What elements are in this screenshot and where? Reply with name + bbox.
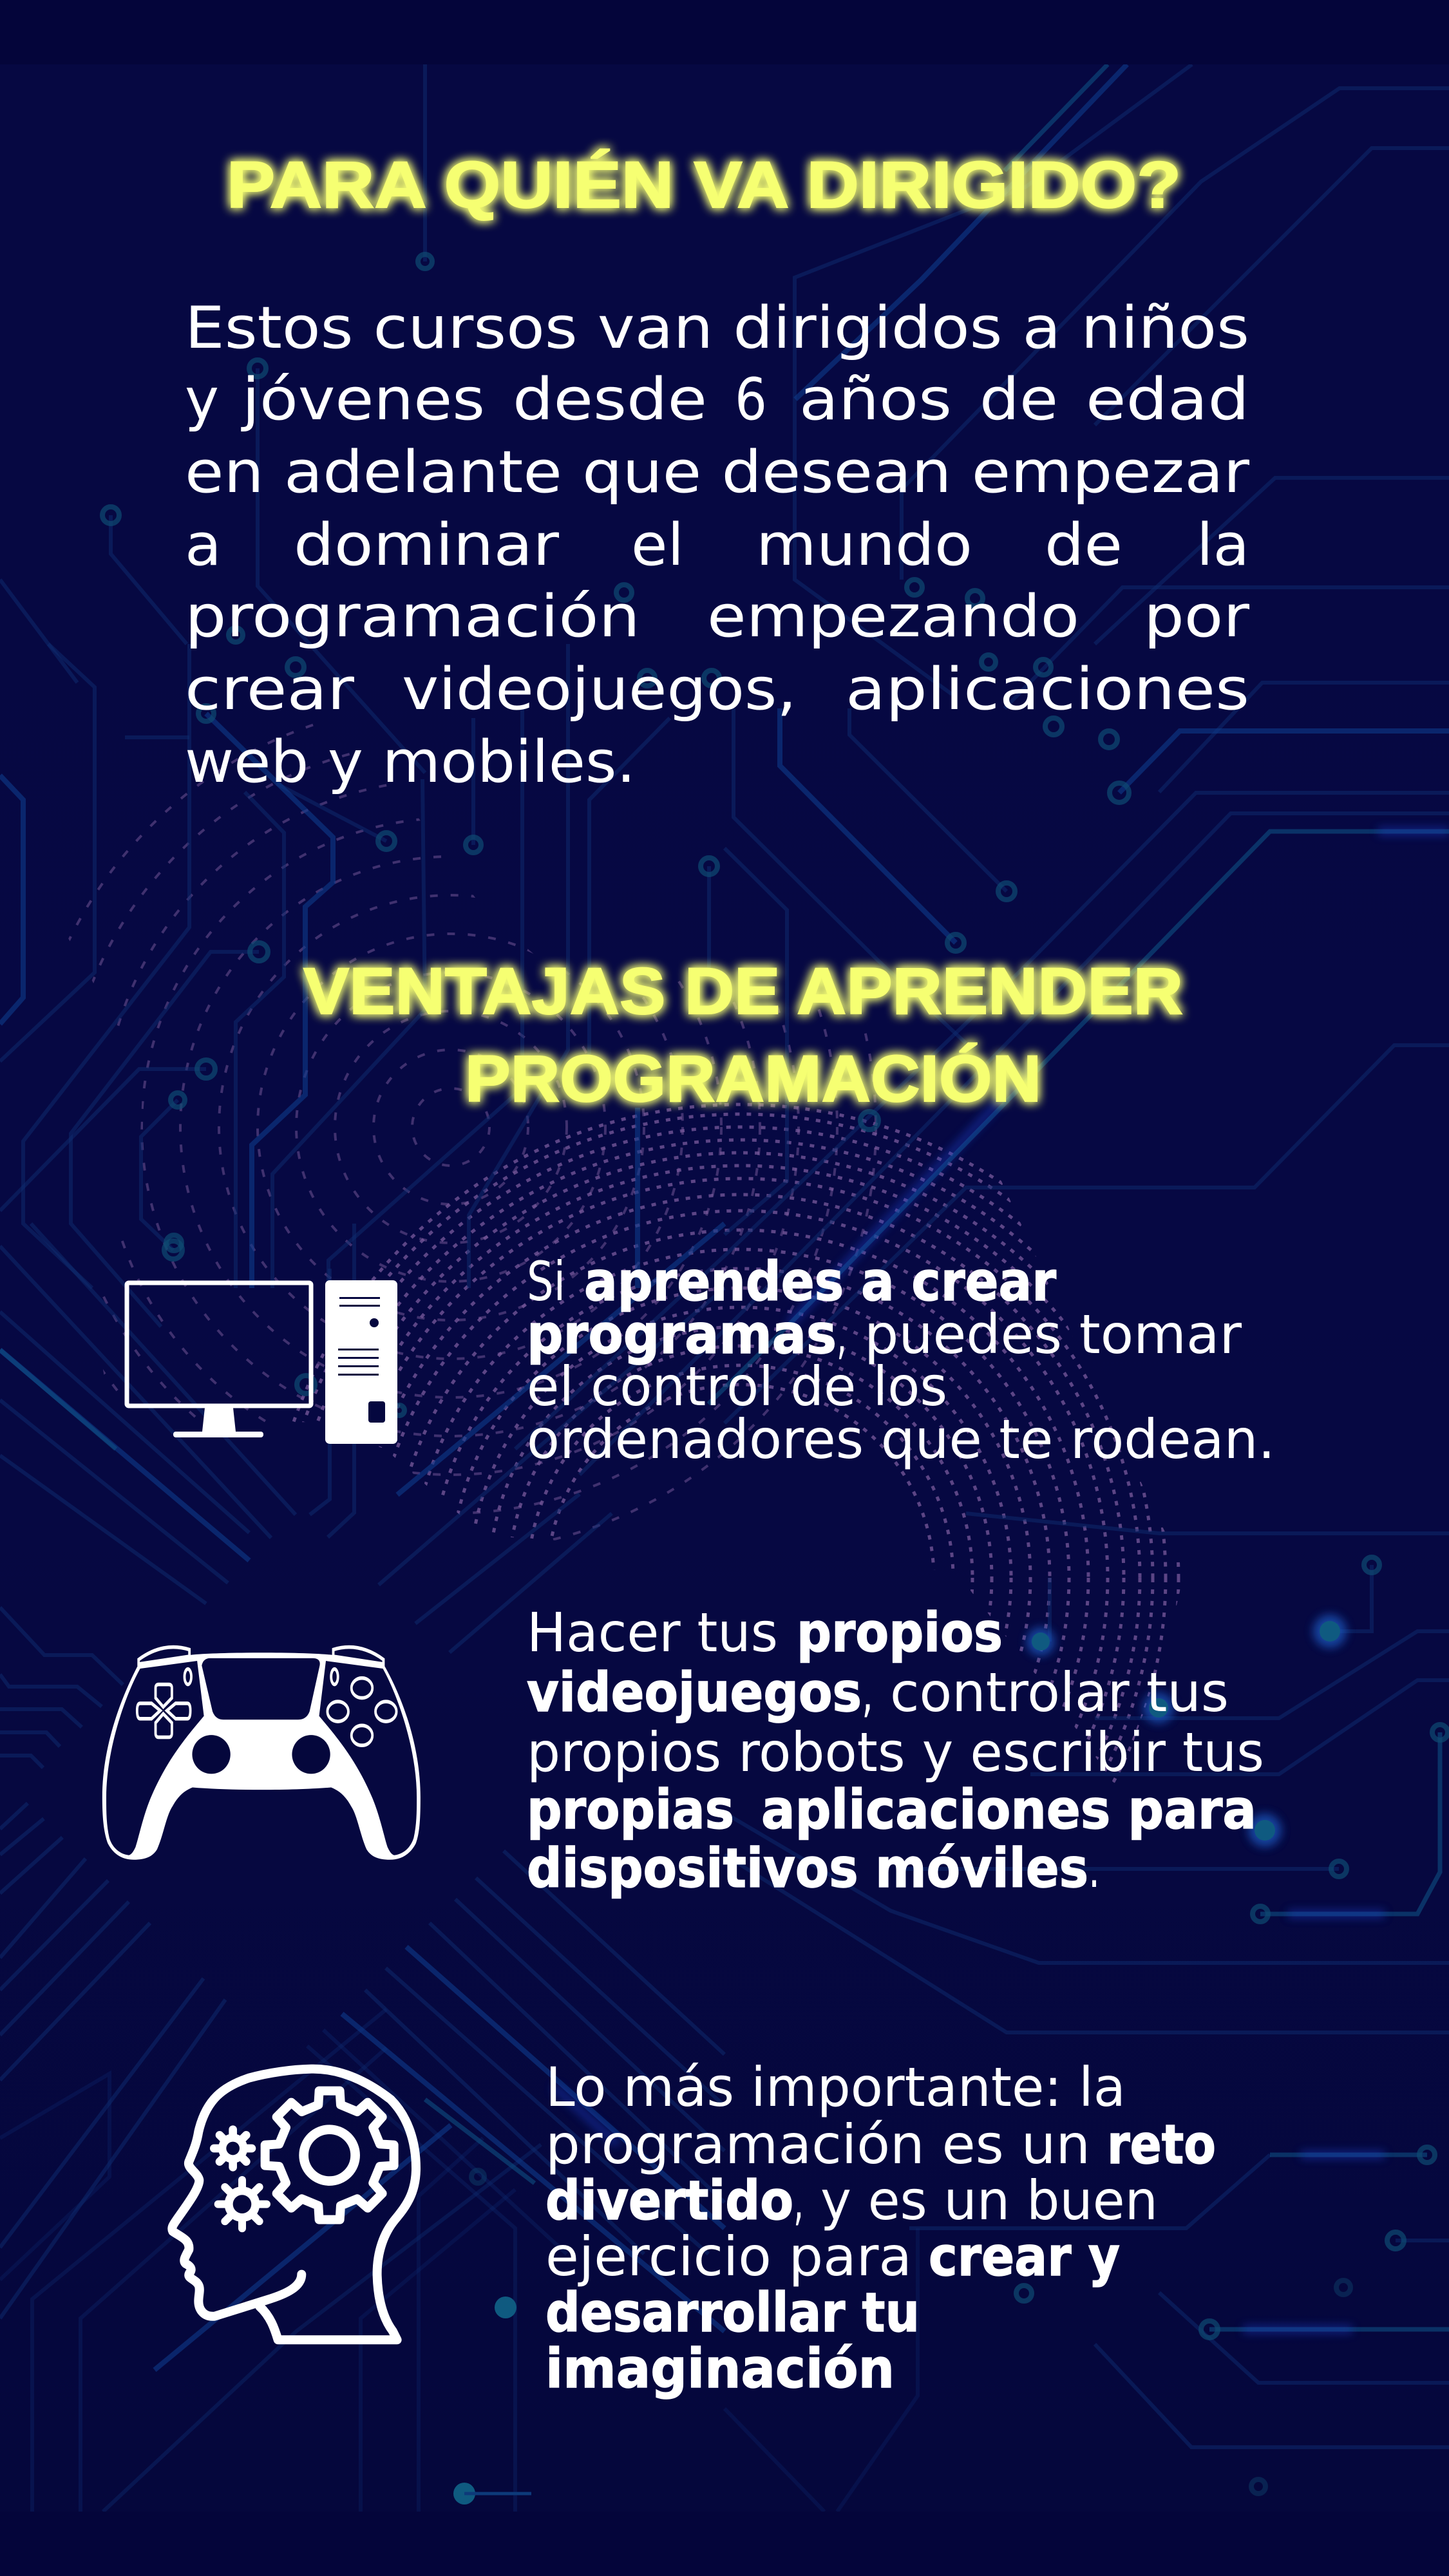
glowing dots <box>1027 1615 1347 1847</box>
intro paragraph: a <box>185 511 222 579</box>
intro paragraph: la <box>1197 511 1249 579</box>
intro paragraph: 6 <box>735 366 767 433</box>
intro paragraph: en adelante que desean empezar <box>185 439 1249 506</box>
text: hacer videojuegos: , <box>862 1661 873 1724</box>
heading: ventajas de aprender programación: VENTAJAS DE APRENDER <box>303 954 1183 1028</box>
text: hacer videojuegos: Hacer tus <box>527 1601 778 1664</box>
diagonal fall <box>307 2046 515 2512</box>
intro paragraph: empezando <box>707 583 1079 650</box>
text: hacer videojuegos: . <box>1088 1837 1100 1900</box>
text: reto divertido: desarrollar tu <box>545 2281 920 2344</box>
text: hacer videojuegos: propios <box>797 1601 1003 1664</box>
intro paragraph: años <box>799 366 952 433</box>
text: hacer videojuegos: controlar tus <box>890 1661 1229 1724</box>
intro paragraph: de <box>980 366 1058 433</box>
text: hacer videojuegos: propios robots y escribir tus <box>527 1721 1264 1784</box>
text: crear programas: , <box>837 1303 847 1366</box>
icon: head with gears <box>172 2069 416 2340</box>
text: reto divertido <box>545 2056 1216 2400</box>
intro paragraph: desde <box>513 366 707 433</box>
title: para quién va dirigido: PARA QUIÉN VA DIRIGIDO? <box>227 148 1181 222</box>
intro paragraph: dominar <box>294 511 559 579</box>
heading: ventajas de aprender programación <box>303 954 1183 1115</box>
intro paragraph: edad <box>1086 366 1249 433</box>
text: crear programas: Si <box>527 1250 565 1313</box>
intro paragraph: videojuegos, <box>402 656 797 723</box>
intro paragraph: mundo <box>756 511 972 579</box>
text: reto divertido: crear y <box>929 2225 1120 2288</box>
intro paragraph: el <box>631 511 684 579</box>
intro paragraph: web y mobiles. <box>185 728 636 796</box>
text: hacer videojuegos: videojuegos <box>527 1661 862 1724</box>
text: crear programas: aprendes a crear <box>584 1250 1057 1313</box>
text: reto divertido: Lo más importante: la <box>545 2056 1126 2119</box>
lower left <box>31 1224 296 1515</box>
intro paragraph: aplicaciones <box>846 656 1249 723</box>
intro paragraph <box>185 294 1249 796</box>
text: hacer videojuegos: dispositivos móviles <box>527 1837 1088 1900</box>
dotted head silhouette <box>68 724 1180 1783</box>
text: hacer videojuegos: aplicaciones para <box>761 1778 1256 1841</box>
text: reto divertido: y es un buen <box>820 2169 1158 2232</box>
text: hacer videojuegos <box>527 1601 1264 1900</box>
text: reto divertido: imaginación <box>545 2337 895 2400</box>
text: reto divertido: programación es un <box>545 2113 1090 2176</box>
text: crear programas: ordenadores que te rodean. <box>527 1408 1275 1471</box>
icon: game controller <box>102 1647 421 1860</box>
text: crear programas: el control de los <box>527 1355 947 1418</box>
text: reto divertido: divertido <box>545 2169 793 2232</box>
intro paragraph: de <box>1045 511 1122 579</box>
intro paragraph: crear <box>185 656 354 723</box>
text: reto divertido: reto <box>1107 2113 1216 2176</box>
text: hacer videojuegos: propias <box>527 1778 734 1841</box>
intro paragraph: y <box>185 366 219 433</box>
text: crear programas <box>527 1250 1275 1471</box>
icon: desktop computer <box>127 1280 397 1444</box>
intro paragraph: jóvenes <box>241 366 485 433</box>
text: reto divertido: ejercicio para <box>545 2225 912 2288</box>
heading: ventajas de aprender programación: PROGRAMACIÓN <box>465 1042 1041 1115</box>
intro paragraph: por <box>1144 583 1249 650</box>
text: crear programas: puedes tomar <box>864 1303 1242 1366</box>
intro paragraph: Estos cursos van dirigidos a niños <box>185 294 1249 362</box>
text: reto divertido: , <box>793 2169 804 2232</box>
intro paragraph: programación <box>185 583 640 650</box>
top traces <box>423 64 427 261</box>
text: crear programas: programas <box>527 1303 837 1366</box>
